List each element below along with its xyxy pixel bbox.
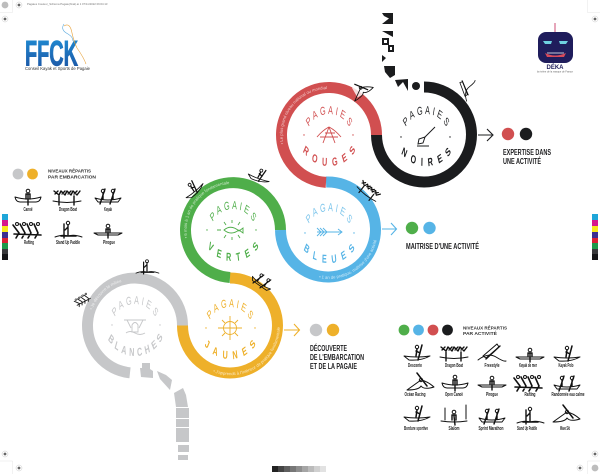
- panel: niveaux par embarcation: NIVEAUX RÉPARTIS: [48, 166, 91, 174]
- emblem: jaunes: PAGAIES: [206, 299, 254, 320]
- ring: jaunes: [182, 278, 278, 373]
- greyscale bar: [272, 466, 326, 472]
- ring captions: • 6 mois à 1 an de pratique fondamentale: [184, 181, 230, 238]
- ring captions: [184, 86, 376, 376]
- icon: kayak on vertes left: [180, 176, 205, 200]
- emblem: blanches: PAGAIES: [112, 296, 158, 316]
- panel: niveaux par embarcation: [13, 166, 122, 246]
- ring caption: blanches: • Je découvre le milieu: [90, 280, 122, 310]
- emblem: rouges: PAGAIES: [306, 106, 352, 126]
- emblem: bleus: [304, 203, 355, 263]
- logo: FFCK: [25, 24, 90, 74]
- panel: niveaux par activite: [399, 324, 585, 432]
- panel: niveaux par activite: Sprint Marathon: [478, 426, 504, 432]
- ring: noires: [376, 87, 471, 182]
- ring: bleus: [280, 182, 375, 277]
- icon: tandem on jaunes: [250, 270, 275, 293]
- panel: niveaux par activite: Descente: [408, 363, 422, 369]
- logo: Déka mask: DÉKA: [546, 63, 564, 71]
- panel: niveaux par embarcation: Pirogue: [103, 240, 115, 246]
- panel: niveaux par activite: Pirogue: [486, 392, 498, 398]
- ring: vertes: [186, 183, 280, 278]
- icon: kayak on vertes top: [247, 165, 272, 185]
- panel: niveaux par activite: Wave Ski: [560, 426, 570, 432]
- legend: expertise: EXPERTISE DANS: [503, 148, 551, 157]
- emblem: noires: [400, 106, 451, 166]
- ring captions: • Le plus grand niveau national ou mondial: [280, 86, 327, 144]
- arrow: jaunes: [284, 324, 300, 336]
- colour bar left: [2, 214, 8, 260]
- emblem: jaunes: [205, 299, 256, 360]
- panel: niveaux par activite: Bordure sportive: [404, 426, 428, 432]
- panel: niveaux par embarcation: Kayak: [104, 207, 112, 213]
- panel: niveaux par embarcation: Rafting: [24, 240, 34, 246]
- logo: FFCK: Conseil Kayak et Sports de Pagaie: [25, 66, 90, 71]
- panel: niveaux par embarcation: Stand Up Paddle: [56, 240, 80, 246]
- legend: maitrise: MAITRISE D'UNE ACTIVITÉ: [406, 242, 479, 251]
- emblem: noires: PAGAIES: [402, 106, 450, 126]
- panel: niveaux par activite: NIVEAUX RÉPARTIS: [463, 324, 507, 330]
- logo: Déka mask: la rivière de la marque de France: [537, 70, 574, 74]
- black torn fragments: [382, 13, 420, 91]
- colour bar right: [592, 214, 598, 260]
- panel: niveaux par embarcation: PAR EMBARCATION: [48, 174, 97, 180]
- ring: blanches: [88, 278, 182, 373]
- panel: niveaux par activite: Stand Up Paddle: [517, 426, 537, 432]
- legend: decouverte: DE L'EMBARCATION: [310, 353, 364, 362]
- ring captions: • 1 an de pratique, maîtrise d'une activité: [319, 240, 376, 279]
- panel: niveaux par activite: Open Canoë: [445, 392, 463, 398]
- panel: niveaux par activite: Océan Racing: [404, 392, 426, 398]
- logo: FFCK: FFCK: [25, 34, 78, 74]
- icon: canoe on blanches left: [74, 292, 91, 307]
- panel: niveaux par activite: Kayak de mer: [519, 363, 537, 369]
- emblem: vertes: VERTES: [209, 242, 258, 261]
- legend: decouverte: DÉCOUVERTE: [310, 344, 347, 353]
- icon: paddler on noires: [455, 76, 475, 101]
- panel: niveaux par activite: Kayak Polo: [558, 363, 574, 369]
- emblem: blanches: [108, 296, 162, 356]
- icon: dragon on bleues: [355, 180, 381, 204]
- panel: niveaux par embarcation: Canoë: [24, 207, 33, 213]
- emblem: noires: NOIRES: [401, 147, 451, 166]
- emblem: rouges: ROUGES: [303, 146, 355, 166]
- legend: decouverte: ET DE LA PAGAIE: [310, 362, 357, 371]
- icon: sup on blanches: [136, 260, 159, 274]
- arrow: noires: [478, 129, 493, 141]
- panel: niveaux par activite: PAR ACTIVITÉ: [463, 329, 497, 336]
- panel: niveaux par activite: Freestyle: [484, 363, 500, 369]
- legend: maitrise: [406, 222, 479, 251]
- ring captions: • J'apprends à l'intérieur de pratique fondamentale: [214, 327, 280, 376]
- grey torn fragments: [140, 363, 189, 460]
- emblem: vertes: [206, 201, 258, 261]
- panel: niveaux par activite: Dragon Boat: [445, 363, 463, 369]
- emblem: bleus: BLEUES: [304, 244, 354, 263]
- emblem: jaunes: JAUNES: [205, 340, 256, 360]
- logo: Déka mask: [537, 23, 574, 74]
- ring: rouges: [282, 87, 376, 182]
- emblem: bleus: PAGAIES: [306, 203, 352, 224]
- arrow: bleus: [382, 223, 396, 235]
- legend: expertise: UNE ACTIVITÉ: [503, 157, 541, 166]
- legend: expertise: [502, 128, 551, 166]
- panel: niveaux par activite: Slalom: [448, 426, 460, 432]
- emblem: rouges: [303, 106, 355, 166]
- emblem: vertes: PAGAIES: [210, 201, 256, 222]
- print marks: Pagaies Couleur_Schéma Pagaie(final).ai 1 07/11/2022 09:04:13: [27, 2, 108, 6]
- legend: decouverte: [310, 324, 364, 371]
- panel: niveaux par activite: Rafting: [524, 392, 536, 398]
- emblem: blanches: BLANCHES: [108, 334, 162, 356]
- panel: niveaux par embarcation: Dragon Boat: [59, 207, 77, 213]
- icon: paddler on rouges: [347, 77, 375, 101]
